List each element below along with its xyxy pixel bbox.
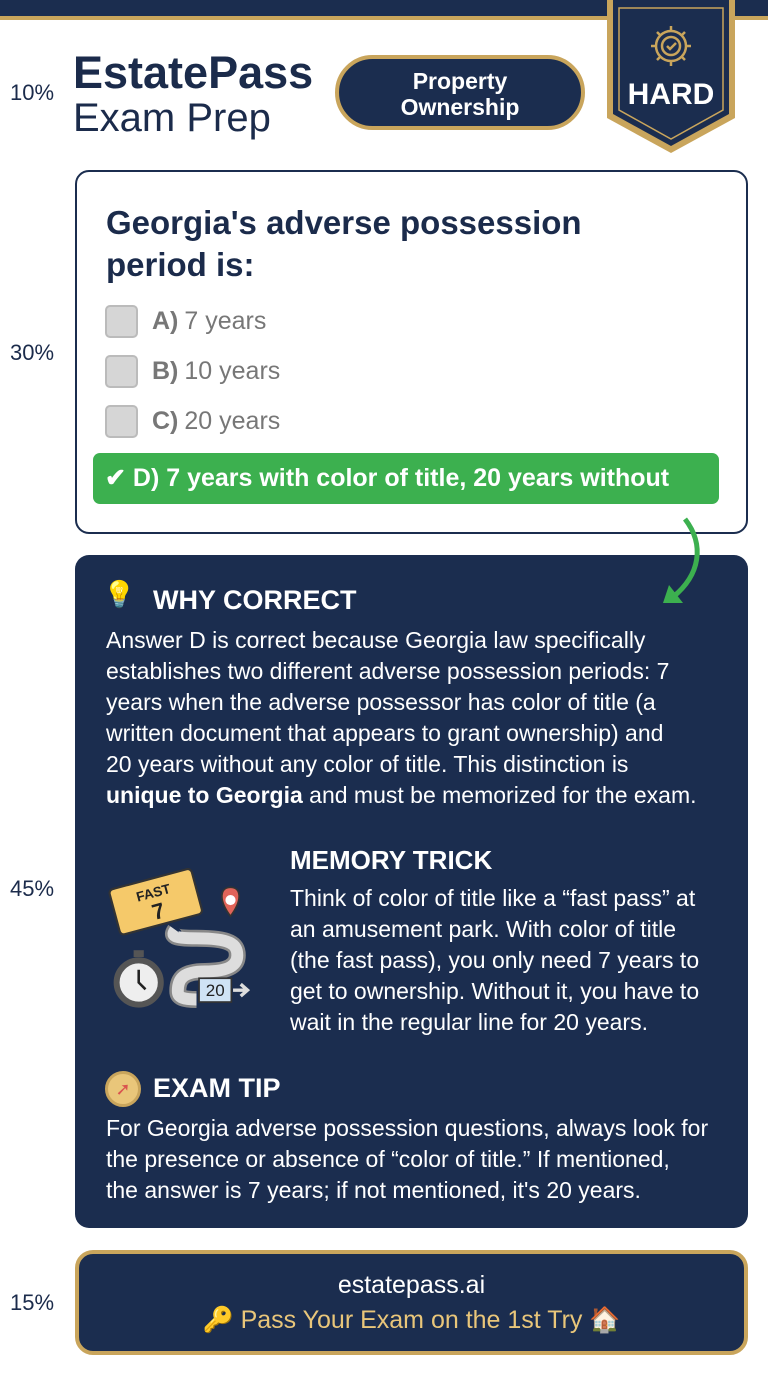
- footer: [75, 1250, 748, 1355]
- memory text: Think of color of title like a “fast pass” at an amusement park. With color of title (the fast pass), you only need 7 years to get to ownership. Without it, you have to wait in the regular line for 20 years.: [290, 885, 699, 1035]
- why text: [106, 627, 697, 808]
- option A: 7 years: [184, 306, 266, 334]
- option C: 20 years: [184, 406, 280, 434]
- tip text: the presence or absence of “color of title.” If mentioned,: [106, 1146, 670, 1172]
- difficulty badge: [607, 0, 735, 153]
- percentage labels: 45%: [10, 876, 54, 901]
- option C: [105, 405, 280, 438]
- option C: C): [152, 406, 178, 434]
- icon: bulb: 💡: [103, 579, 135, 609]
- why text: years when the adverse possessor has color of title (a: [106, 689, 656, 715]
- icon: fast pass road: 20: [206, 981, 225, 1000]
- percentage labels: 15%: [10, 1290, 54, 1315]
- option B: 10 years: [184, 356, 280, 384]
- option A: [105, 305, 266, 338]
- why text: written document that appears to grant ownership) and: [106, 720, 663, 746]
- why text: 20 years without any color of title. This distinction is: [106, 751, 628, 777]
- icon: compass: [105, 1071, 141, 1107]
- why text: establishes two different adverse possession periods: 7: [106, 658, 669, 684]
- percentage labels: 10%: [10, 80, 54, 105]
- arrow: green curve: [663, 518, 700, 603]
- footer: 🔑 Pass Your Exam on the 1st Try 🏠: [202, 1306, 620, 1334]
- footer: estatepass.ai: [338, 1271, 485, 1299]
- correct answer D: [93, 453, 719, 504]
- icon: fast pass road: 7: [149, 898, 167, 925]
- brand title: Exam Prep: [73, 96, 271, 140]
- why text: unique to Georgia and must be memorized for the exam.: [106, 782, 697, 808]
- icon: gear: [651, 26, 691, 66]
- tip text: [106, 1115, 708, 1203]
- tip text: For Georgia adverse possession questions, always look for: [106, 1115, 708, 1141]
- brand title: EstatePass: [73, 47, 313, 98]
- correct answer D: ✔ D) 7 years with color of title, 20 years without: [105, 464, 669, 492]
- icon: fast pass road: FAST: [135, 881, 173, 905]
- tip text: the answer is 7 years; if not mentioned, it's 20 years.: [106, 1177, 641, 1203]
- category pill: Property: [413, 68, 507, 94]
- icon: fast pass road: [108, 868, 250, 1008]
- heading: why correct: WHY CORRECT: [153, 585, 357, 615]
- why text: Answer D is correct because Georgia law specifically: [106, 627, 645, 653]
- question: Georgia's adverse possession period is:: [106, 204, 582, 283]
- percentage labels: [10, 80, 54, 1315]
- option B: [105, 355, 280, 388]
- heading: exam tip: EXAM TIP: [153, 1073, 281, 1103]
- difficulty badge: HARD: [628, 78, 714, 111]
- brand title: [73, 47, 313, 140]
- option B: B): [152, 356, 178, 384]
- question card: [75, 170, 748, 534]
- category pill: Ownership: [401, 94, 519, 120]
- icon: compass: ➚: [115, 1078, 131, 1098]
- percentage labels: 30%: [10, 340, 54, 365]
- heading: memory trick: MEMORY TRICK: [290, 845, 492, 875]
- category pill: [335, 55, 585, 130]
- top bar: [0, 0, 768, 20]
- option A: A): [152, 306, 178, 334]
- explanation panel: [75, 555, 748, 1228]
